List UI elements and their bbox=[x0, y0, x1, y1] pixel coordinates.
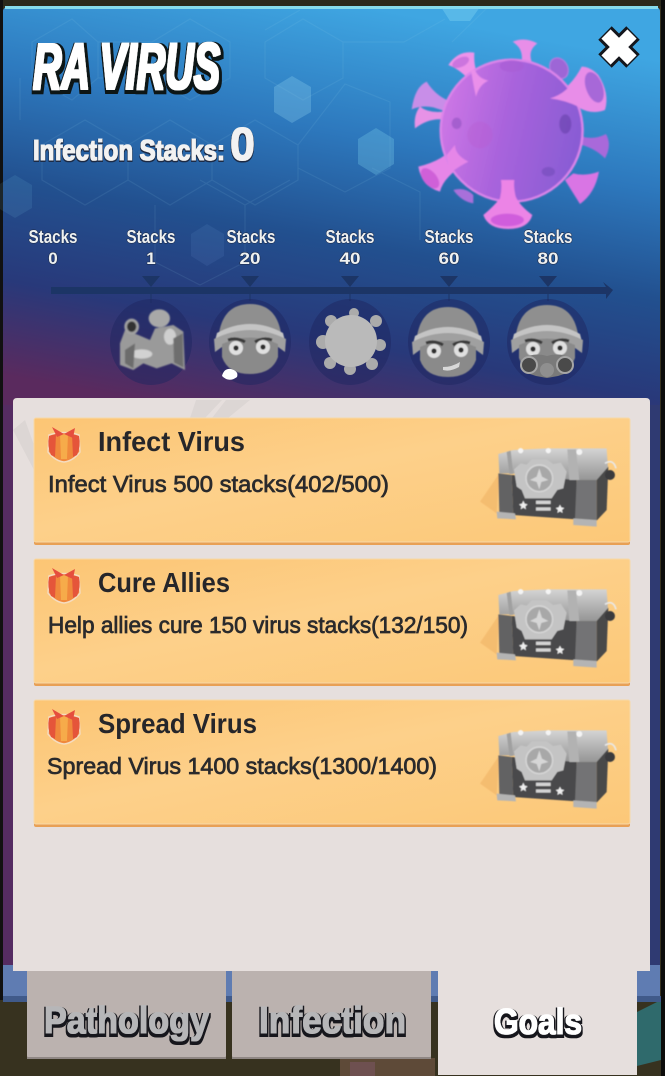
stack labels: 40 bbox=[340, 249, 360, 268]
tab: pathology bbox=[27, 960, 226, 1059]
stack labels: Stacks bbox=[424, 227, 474, 247]
card: spread virus bbox=[34, 700, 630, 827]
icon: silver chest bbox=[480, 448, 616, 527]
close button bbox=[605, 33, 633, 61]
title: RA VIRUS bbox=[33, 29, 220, 103]
tab: infection bbox=[232, 960, 431, 1059]
infection stacks label: Infection Stacks: bbox=[33, 135, 225, 167]
arrow line bbox=[51, 276, 613, 303]
card: infect virus: Infect Virus 500 stacks(402/500) bbox=[48, 471, 389, 497]
stack labels: Stacks bbox=[126, 227, 176, 247]
stack labels: 20 bbox=[240, 249, 260, 268]
icon: soldier with mask bbox=[209, 299, 291, 385]
stack labels: 60 bbox=[438, 249, 460, 268]
card: infect virus: Infect Virus bbox=[98, 426, 245, 457]
card: infect virus bbox=[34, 418, 630, 545]
icon: silver chest bbox=[480, 730, 616, 809]
stack labels bbox=[28, 227, 572, 268]
icon: gift bbox=[48, 568, 80, 603]
infection stacks label: 0 bbox=[230, 118, 255, 170]
card: cure allies bbox=[34, 559, 630, 686]
tab label: goals: Goals bbox=[494, 1001, 582, 1042]
icon: soldier gas mask bbox=[507, 299, 589, 385]
card: cure allies: Help allies cure 150 virus stacks(132/150) bbox=[48, 612, 468, 638]
card: spread virus: Spread Virus bbox=[98, 708, 257, 739]
icon: soldier infected bbox=[408, 299, 490, 385]
icon: purple virus bbox=[412, 40, 609, 229]
stack labels: Stacks bbox=[28, 227, 78, 247]
tab: pathology: Pathology bbox=[44, 1000, 209, 1042]
stack labels: 1 bbox=[146, 249, 156, 268]
progress timeline bbox=[28, 227, 613, 385]
icon: silver chest bbox=[480, 589, 616, 668]
stack labels: 80 bbox=[538, 249, 558, 268]
icon: grey virus bbox=[309, 299, 391, 385]
icon: gift bbox=[48, 709, 80, 744]
tab: infection: Infection bbox=[259, 1000, 406, 1042]
panel: goals list bbox=[13, 398, 650, 1075]
icon: gift bbox=[48, 427, 80, 462]
stack labels: 0 bbox=[48, 249, 58, 268]
infection stacks label bbox=[33, 118, 255, 170]
stack labels: Stacks bbox=[524, 227, 572, 247]
card: spread virus: Spread Virus 1400 stacks(1300/1400) bbox=[47, 753, 437, 779]
card: cure allies: Cure Allies bbox=[98, 567, 230, 598]
icon: building milestone bbox=[110, 299, 192, 385]
stack labels: Stacks bbox=[326, 227, 374, 247]
stack labels: Stacks bbox=[226, 227, 276, 247]
